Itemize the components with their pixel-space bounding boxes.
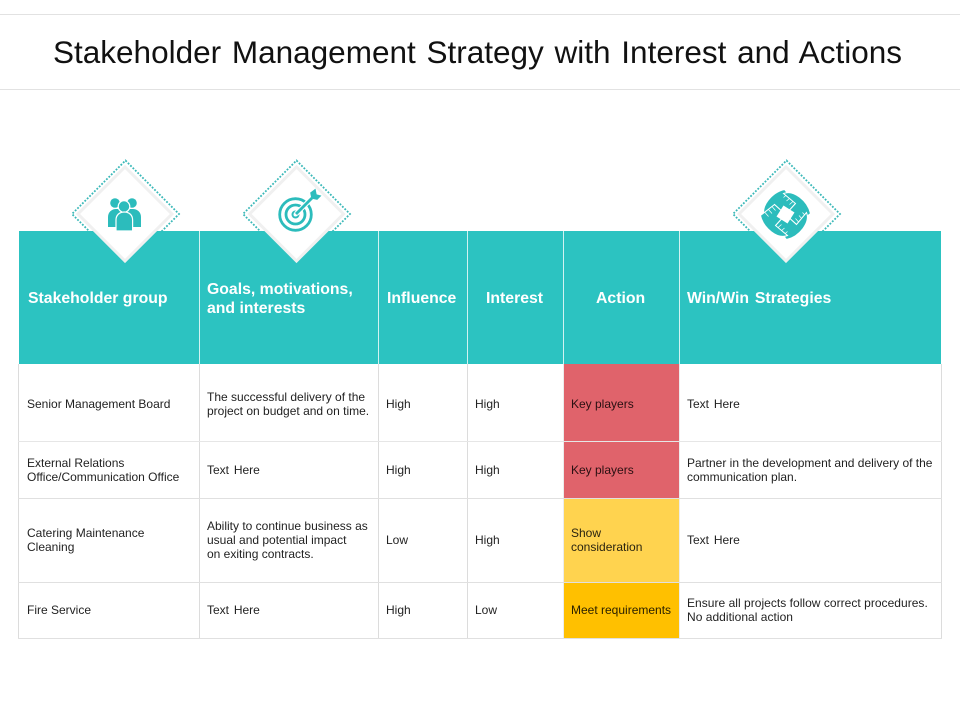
stakeholder: Office/Communication Office [27, 470, 179, 484]
action cell: show consideration: Show [571, 526, 601, 540]
action cell: key players row 1 [563, 364, 679, 442]
row 4: fire service [27, 596, 928, 624]
stakeholder: Catering Maintenance [27, 526, 144, 540]
stakeholder: Cleaning [27, 540, 74, 554]
goals: Text Here [207, 463, 260, 477]
stakeholder: Fire Service [27, 603, 91, 617]
row 1: senior management board [27, 390, 740, 418]
strategy: Text Here [687, 397, 740, 411]
influence: Low [386, 532, 408, 546]
action cell: meet requirements [563, 582, 679, 638]
interest: High [475, 463, 500, 477]
header: goals: Goals, motivations, [207, 280, 353, 298]
strategy: Partner in the development and delivery of the [687, 456, 932, 470]
interest: High [475, 532, 500, 546]
interest: High [475, 397, 500, 411]
strategy: Ensure all projects follow correct procedures. [687, 596, 928, 610]
action cell: show consideration: consideration [571, 540, 642, 554]
header: goals: and interests [207, 300, 305, 316]
goals: The successful delivery of the [207, 390, 365, 404]
strategy: No additional action [687, 610, 793, 624]
target glyph [280, 190, 320, 230]
title: Stakeholder Management Strategy with Interest and Actions [53, 34, 902, 70]
row 2: external relations [27, 456, 932, 484]
people glyph [108, 198, 141, 231]
header: win/win strategies: Win/Win Strategies [687, 290, 831, 307]
goals: Text Here [207, 603, 260, 617]
goals [207, 390, 369, 418]
header: interest: Interest [486, 290, 543, 307]
influence: High [386, 463, 411, 477]
row 3: catering maintenance [27, 518, 740, 560]
stakeholder [27, 526, 144, 554]
action cell: key players row 1: Key players [571, 396, 634, 410]
influence: High [386, 603, 411, 617]
strategy [687, 456, 932, 484]
interest: Low [475, 603, 497, 617]
goals [207, 518, 368, 560]
goals: on exiting contracts. [207, 546, 314, 560]
stakeholder: External Relations [27, 456, 124, 470]
action cell: meet requirements: Meet requirements [571, 603, 671, 617]
goals: project on budget and on time. [207, 404, 369, 418]
header: action: Action [596, 290, 645, 307]
icon: hands badge [680, 160, 941, 271]
strategy: communication plan. [687, 470, 797, 484]
header: stakeholder group: Stakeholder group [28, 290, 168, 307]
goals: usual and potential impact [207, 532, 346, 546]
action cell: show consideration [563, 498, 679, 582]
header: goals [207, 280, 353, 316]
goals: Ability to continue business as [207, 518, 368, 532]
grid lines [18, 364, 19, 639]
icon: people badge [19, 160, 199, 271]
stakeholder: Senior Management Board [27, 397, 170, 411]
strategy: Text Here [687, 532, 740, 546]
table header band [19, 231, 941, 364]
strategy [687, 596, 928, 624]
influence: High [386, 397, 411, 411]
header: influence: Influence [387, 290, 456, 307]
action cell: key players row 2 [563, 442, 679, 498]
icon: target badge [200, 160, 378, 271]
stakeholder [27, 456, 179, 484]
hands glyph [760, 190, 810, 240]
action cell: key players row 2: Key players [571, 463, 634, 477]
